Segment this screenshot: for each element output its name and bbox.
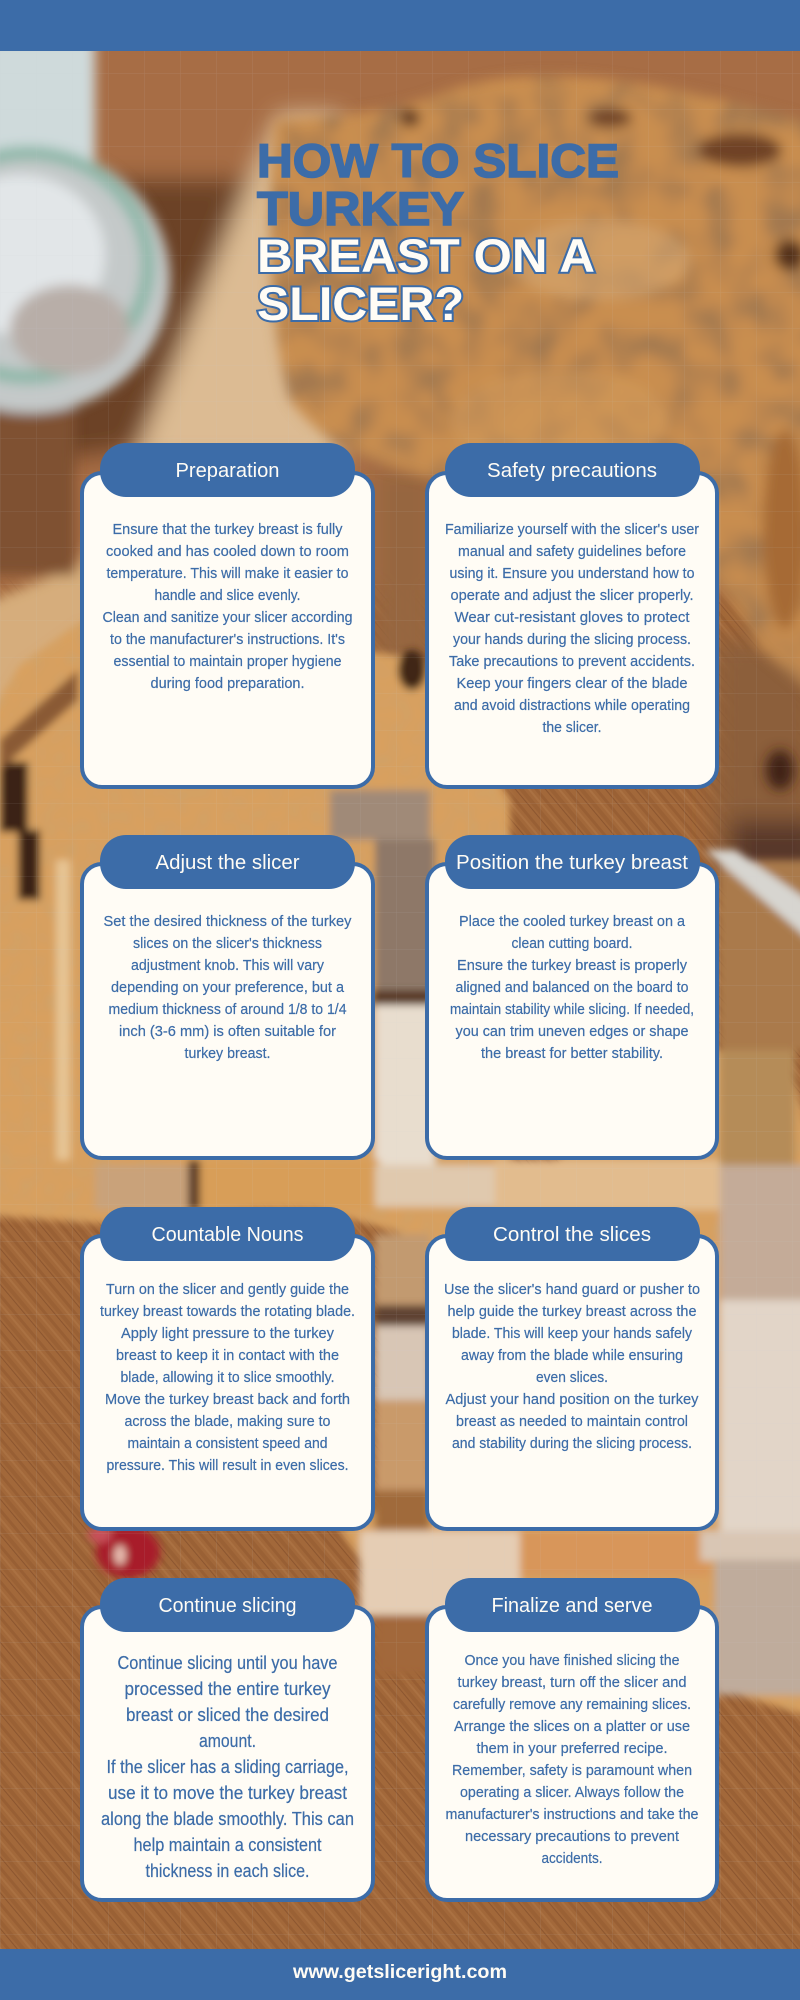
body text: continue slicing: processed the entire turkey bbox=[124, 1679, 330, 1699]
body text: safety precautions: the slicer. bbox=[542, 719, 602, 736]
body text: safety precautions: operate and adjust the slicer properly. bbox=[450, 587, 694, 604]
body text: preparation: Clean and sanitize your slicer according bbox=[102, 609, 352, 626]
panel: countable nouns bbox=[82, 1207, 373, 1529]
body text: countable nouns bbox=[100, 1281, 355, 1474]
body text: control the slices: breast as needed to maintain control bbox=[456, 1413, 688, 1430]
body text: adjust the slicer: depending on your preference, but a bbox=[111, 979, 345, 996]
body text: continue slicing: If the slicer has a sliding carriage, bbox=[106, 1757, 348, 1777]
body text: position the turkey breast: clean cutting board. bbox=[512, 935, 632, 952]
body text: position the turkey breast: aligned and balanced on the board to bbox=[456, 979, 688, 996]
heading pill: position the turkey breast bbox=[445, 835, 700, 889]
heading pill: safety precautions bbox=[445, 443, 700, 497]
body text: finalize and serve: Once you have finished slicing the bbox=[464, 1652, 680, 1669]
body text: safety precautions: using it. Ensure you understand how to bbox=[450, 565, 694, 582]
body text: continue slicing: thickness in each slice. bbox=[146, 1861, 310, 1881]
body text: countable nouns: breast to keep it in contact with the bbox=[116, 1347, 339, 1364]
body text: continue slicing: help maintain a consistent bbox=[134, 1835, 322, 1855]
body text: safety precautions: Keep your fingers clear of the blade bbox=[456, 675, 688, 692]
blurred upper turkey bbox=[270, 76, 800, 700]
body text: countable nouns: Move the turkey breast back and forth bbox=[105, 1391, 350, 1408]
body text: continue slicing: breast or sliced the desired bbox=[126, 1705, 329, 1725]
body text: control the slices: Adjust your hand position on the turkey bbox=[446, 1391, 699, 1408]
left board corner bbox=[0, 450, 330, 720]
body text: continue slicing: use it to move the turkey breast bbox=[108, 1783, 347, 1803]
panel: adjust the slicer bbox=[82, 835, 373, 1158]
tomato bbox=[96, 1526, 160, 1578]
body text: continue slicing: amount. bbox=[199, 1731, 256, 1751]
footer bar with website: www.getsliceright.com bbox=[292, 1962, 507, 1983]
body text: control the slices: blade. This will keep your hands safely bbox=[452, 1325, 692, 1342]
heading pill: control the slices bbox=[445, 1207, 700, 1261]
body text: continue slicing bbox=[101, 1653, 354, 1881]
panel: position the turkey breast bbox=[427, 835, 717, 1158]
body text: adjust the slicer bbox=[104, 913, 352, 1062]
heading pill: countable nouns: Countable Nouns bbox=[152, 1224, 304, 1246]
body text: position the turkey breast bbox=[450, 913, 694, 1062]
body text: control the slices: away from the blade while ensuring bbox=[461, 1347, 683, 1364]
body text: continue slicing: along the blade smoothly. This can bbox=[101, 1809, 354, 1829]
body text: position the turkey breast: Place the cooled turkey breast on a bbox=[459, 913, 686, 930]
body text: adjust the slicer: slices on the slicer's thickness bbox=[133, 935, 322, 952]
body text: countable nouns: Turn on the slicer and gently guide the bbox=[106, 1281, 349, 1298]
body text: adjust the slicer: adjustment knob. This will vary bbox=[131, 957, 324, 974]
body text: control the slices: Use the slicer's hand guard or pusher to bbox=[444, 1281, 700, 1298]
body text: position the turkey breast: the breast for better stability. bbox=[481, 1045, 663, 1062]
body text: finalize and serve: accidents. bbox=[542, 1850, 602, 1867]
body text: position the turkey breast: maintain stability while slicing. If needed, bbox=[450, 1001, 694, 1018]
body text: adjust the slicer: medium thickness of around 1/8 to 1/4 bbox=[108, 1001, 346, 1018]
body text: preparation bbox=[102, 521, 352, 692]
heading pill: control the slices: Control the slices bbox=[493, 1224, 651, 1246]
body text: finalize and serve: them in your preferred recipe. bbox=[476, 1740, 668, 1757]
title: BREAST ON A bbox=[257, 229, 595, 282]
body text: preparation: temperature. This will make it easier to bbox=[106, 565, 348, 582]
body text: countable nouns: across the blade, making sure to bbox=[124, 1413, 330, 1430]
main turkey slices bbox=[0, 622, 800, 1720]
heading pill: continue slicing: Continue slicing bbox=[158, 1595, 296, 1617]
body text: countable nouns: turkey breast towards the rotating blade. bbox=[100, 1303, 355, 1320]
body text: preparation: during food preparation. bbox=[150, 675, 304, 692]
body text: safety precautions: manual and safety guidelines before bbox=[458, 543, 686, 560]
body text: finalize and serve: Remember, safety is paramount when bbox=[452, 1762, 692, 1779]
panel: continue slicing bbox=[82, 1578, 373, 1900]
title bbox=[257, 134, 619, 330]
body text: safety precautions: your hands during the slicing process. bbox=[453, 631, 691, 648]
body text: countable nouns: Apply light pressure to the turkey bbox=[121, 1325, 334, 1342]
body text: control the slices bbox=[444, 1281, 700, 1452]
body text: countable nouns: blade, allowing it to slice smoothly. bbox=[120, 1369, 334, 1386]
heading pill: adjust the slicer bbox=[100, 835, 355, 889]
body text: finalize and serve bbox=[446, 1652, 698, 1867]
heading pill: countable nouns bbox=[100, 1207, 355, 1261]
top header bar bbox=[0, 0, 800, 51]
body text: safety precautions: and avoid distractions while operating bbox=[454, 697, 690, 714]
footer bar with website bbox=[0, 1949, 800, 2000]
body text: safety precautions: Familiarize yourself with the slicer's user bbox=[445, 521, 699, 538]
body text: finalize and serve: necessary precautions to prevent bbox=[465, 1828, 680, 1845]
body text: finalize and serve: operating a slicer. Always follow the bbox=[460, 1784, 684, 1801]
body text: adjust the slicer: turkey breast. bbox=[184, 1045, 270, 1062]
panel: preparation bbox=[82, 443, 373, 787]
body text: preparation: essential to maintain proper hygiene bbox=[114, 653, 342, 670]
body text: safety precautions bbox=[445, 521, 699, 736]
heading pill: adjust the slicer: Adjust the slicer bbox=[156, 852, 300, 874]
body text: countable nouns: maintain a consistent speed and bbox=[128, 1435, 328, 1452]
body text: preparation: to the manufacturer's instructions. It's bbox=[110, 631, 345, 648]
body text: safety precautions: Take precautions to prevent accidents. bbox=[449, 653, 695, 670]
body text: position the turkey breast: Ensure the turkey breast is properly bbox=[457, 957, 687, 974]
heading pill: preparation: Preparation bbox=[176, 460, 280, 482]
heading pill: safety precautions: Safety precautions bbox=[487, 460, 657, 482]
body text: preparation: handle and slice evenly. bbox=[154, 587, 300, 604]
body text: safety precautions: Wear cut-resistant gloves to protect bbox=[454, 609, 690, 626]
heading pill: finalize and serve bbox=[445, 1578, 700, 1632]
body text: finalize and serve: Arrange the slices on a platter or use bbox=[454, 1718, 690, 1735]
body text: finalize and serve: carefully remove any remaining slices. bbox=[453, 1696, 691, 1713]
body text: continue slicing: Continue slicing until you have bbox=[118, 1653, 338, 1673]
body text: adjust the slicer: inch (3-6 mm) is often suitable for bbox=[119, 1023, 336, 1040]
body text: preparation: cooked and has cooled down to room bbox=[106, 543, 349, 560]
body text: adjust the slicer: Set the desired thickness of the turkey bbox=[104, 913, 352, 930]
heading pill: finalize and serve: Finalize and serve bbox=[492, 1595, 652, 1617]
title: HOW TO SLICE bbox=[257, 134, 619, 187]
body text: position the turkey breast: you can trim uneven edges or shape bbox=[456, 1023, 688, 1040]
body text: preparation: Ensure that the turkey breast is fully bbox=[112, 521, 343, 538]
heading pill: preparation bbox=[100, 443, 355, 497]
body text: finalize and serve: turkey breast, turn off the slicer and bbox=[458, 1674, 686, 1691]
panel: finalize and serve bbox=[427, 1578, 717, 1900]
heading pill: continue slicing bbox=[100, 1578, 355, 1632]
title: TURKEY bbox=[257, 182, 464, 235]
body text: countable nouns: pressure. This will result in even slices. bbox=[106, 1457, 348, 1474]
body text: finalize and serve: manufacturer's instructions and take the bbox=[446, 1806, 698, 1823]
body text: control the slices: and stability during the slicing process. bbox=[452, 1435, 692, 1452]
heading pill: position the turkey breast: Position the turkey breast bbox=[456, 852, 688, 874]
body text: control the slices: even slices. bbox=[536, 1369, 608, 1386]
panel: safety precautions bbox=[427, 443, 717, 787]
panel: control the slices bbox=[427, 1207, 717, 1529]
glass jar bbox=[0, 40, 95, 190]
body text: control the slices: help guide the turkey breast across the bbox=[448, 1303, 696, 1320]
title: SLICER? bbox=[257, 277, 464, 330]
